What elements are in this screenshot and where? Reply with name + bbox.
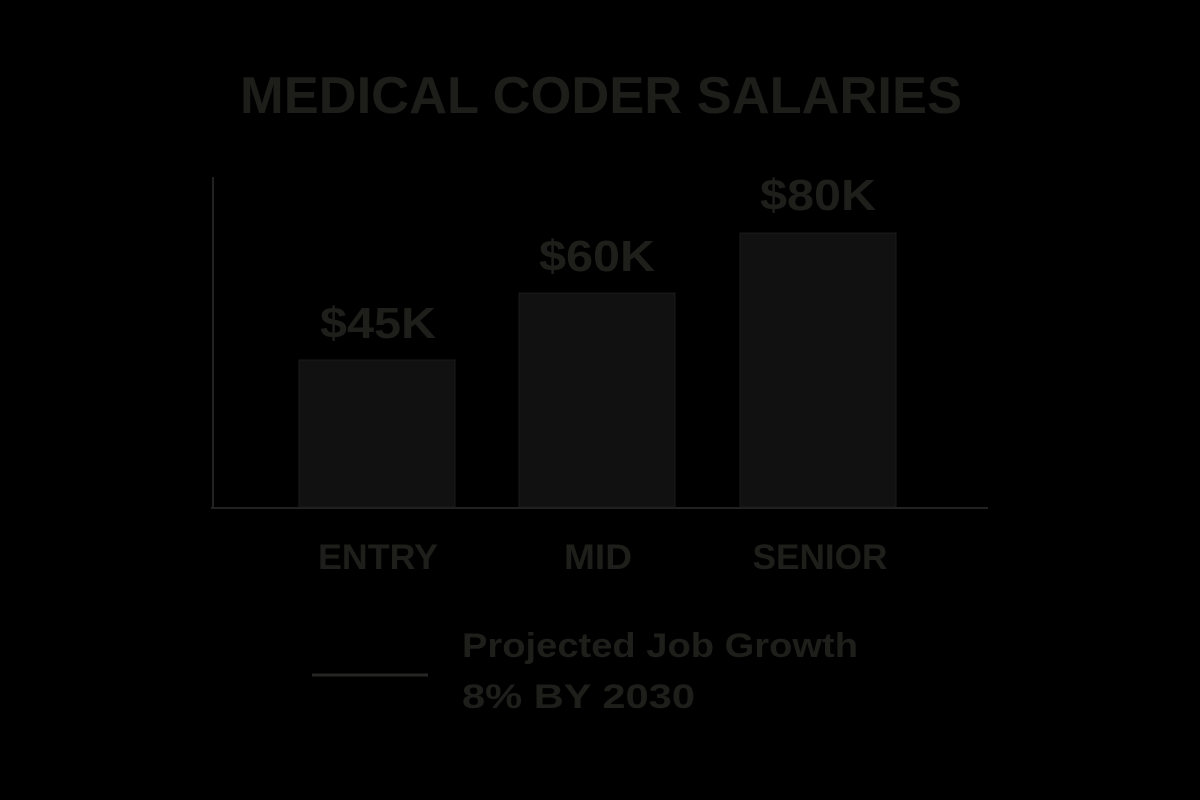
bar: mid bbox=[519, 293, 675, 507]
legend text: Projected Job Growth bbox=[462, 627, 858, 665]
bar: entry bbox=[299, 360, 455, 507]
legend line bbox=[312, 674, 428, 676]
bar: senior bbox=[740, 233, 896, 507]
value: $60K: $60K bbox=[539, 232, 655, 281]
y axis bbox=[212, 177, 214, 509]
value: $45K: $45K bbox=[320, 299, 436, 348]
label: mid: MID bbox=[564, 538, 632, 577]
legend bbox=[312, 627, 858, 716]
legend: 8% BY 2030 bbox=[462, 678, 695, 716]
label: senior: SENIOR bbox=[752, 538, 888, 577]
bar chart bbox=[211, 171, 988, 577]
x axis bbox=[211, 507, 988, 509]
value: $80K: $80K bbox=[760, 171, 876, 220]
title: MEDICAL CODER SALARIES bbox=[240, 67, 962, 125]
label: entry: ENTRY bbox=[318, 538, 438, 577]
